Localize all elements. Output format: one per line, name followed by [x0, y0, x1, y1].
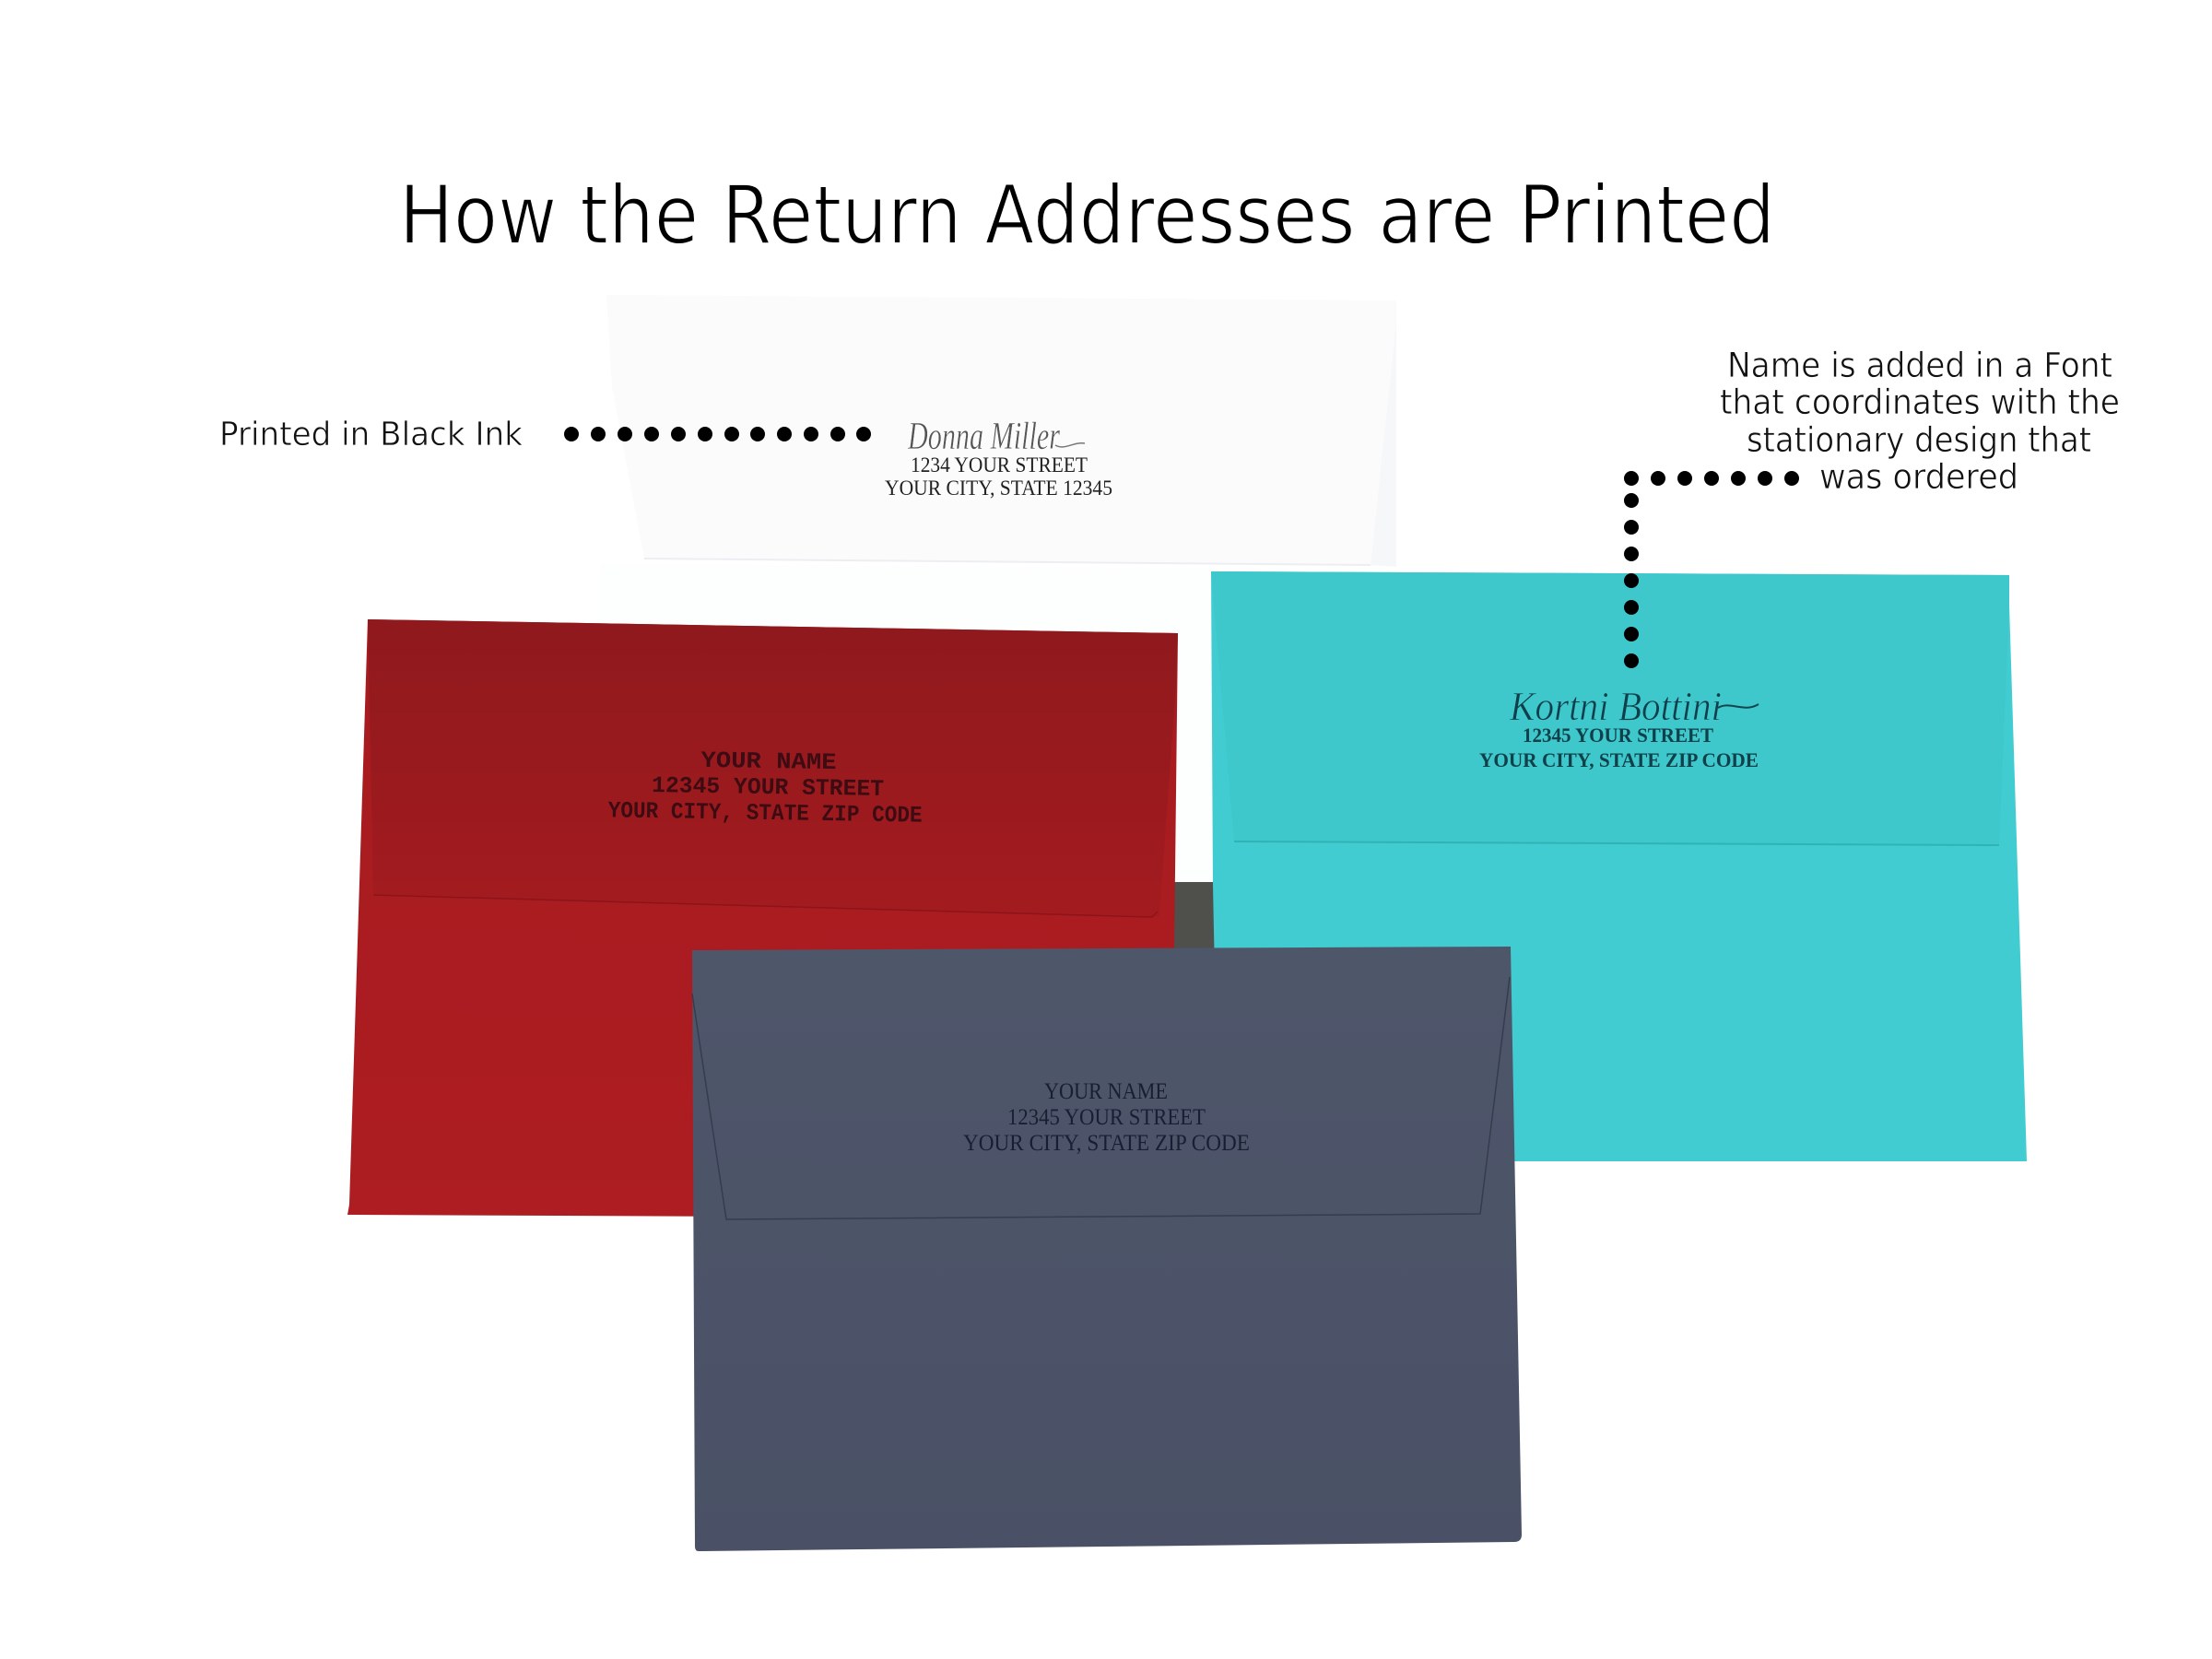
grey envelope address: YOUR NAME [1044, 1079, 1168, 1104]
red envelope flap [368, 619, 1178, 916]
red envelope address: 12345 YOUR STREET [652, 772, 884, 803]
white envelope address: YOUR CITY, STATE 12345 [885, 477, 1112, 500]
dark background patch [1171, 882, 1217, 950]
grey envelope [692, 947, 1522, 1551]
grey envelope address: 12345 YOUR STREET [1007, 1105, 1206, 1130]
grey envelope address [963, 1079, 1250, 1156]
teal envelope address: Kortni Bottini [1509, 684, 1722, 729]
grey envelope address: YOUR CITY, STATE ZIP CODE [963, 1131, 1250, 1156]
teal envelope address: 12345 YOUR STREET [1523, 724, 1713, 747]
callout: name font: that coordinates with the [1720, 382, 2120, 422]
white envelope address [885, 416, 1112, 500]
grey envelope flap [692, 977, 1510, 1219]
teal envelope address [1479, 684, 1759, 771]
dotted arrow: name font [1624, 471, 1799, 668]
dotted arrow: black ink [564, 427, 871, 441]
label: printed in black ink: Printed in Black Ink [219, 416, 523, 453]
red envelope [347, 619, 1178, 1218]
red envelope address: YOUR NAME [700, 747, 837, 776]
callout: name font: stationary design that [1747, 420, 2091, 460]
red envelope address [607, 746, 924, 830]
callout: name font: Name is added in a Font [1727, 346, 2112, 385]
callout: name font: was ordered [1819, 457, 2018, 497]
white envelope address: 1234 YOUR STREET [911, 453, 1088, 477]
teal envelope address: YOUR CITY, STATE ZIP CODE [1479, 748, 1759, 771]
white envelope flap [606, 295, 1396, 565]
teal envelope flap [1211, 571, 2009, 845]
callout: name font [1720, 346, 2120, 497]
white envelope [600, 295, 1397, 951]
red envelope address: YOUR CITY, STATE ZIP CODE [607, 797, 923, 830]
title: How the Return Addresses are Printed [399, 168, 1775, 263]
white envelope address: Donna Miller [907, 416, 1060, 458]
teal envelope [1211, 571, 2027, 1161]
